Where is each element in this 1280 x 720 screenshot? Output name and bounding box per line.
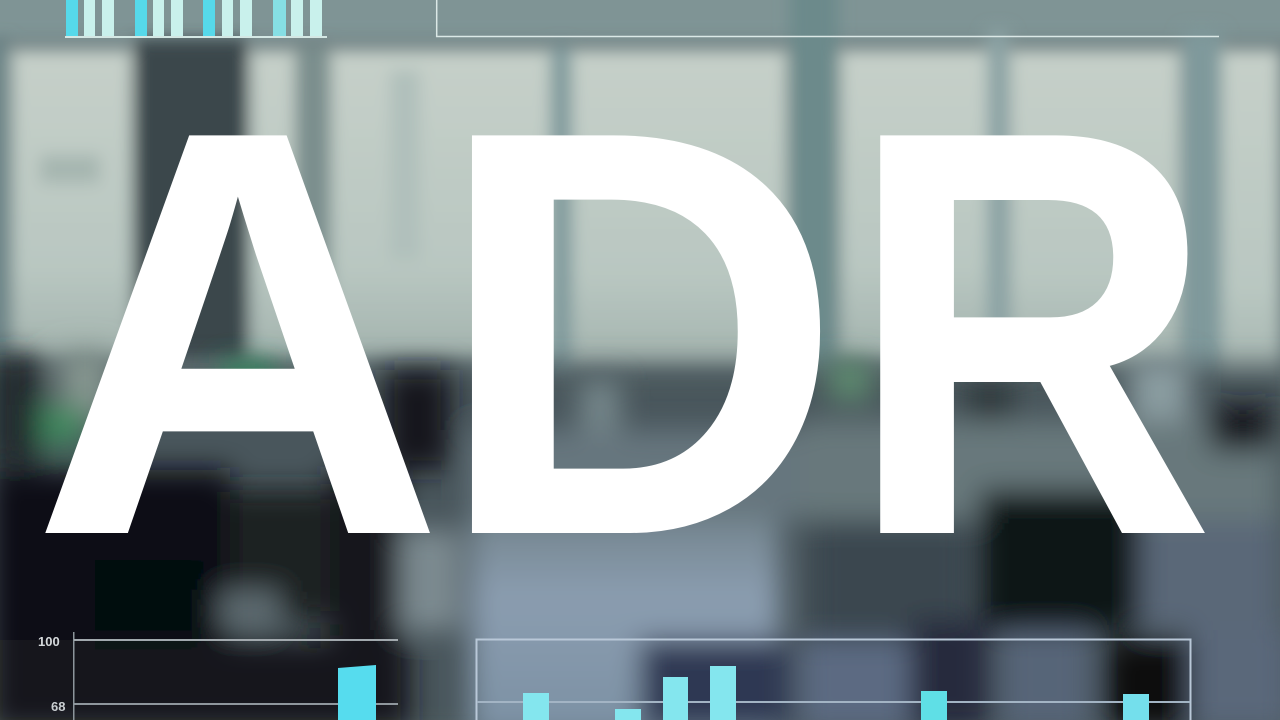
cyan bar <box>338 665 376 720</box>
top right empty chart frame <box>437 0 1219 36</box>
top bar strip chart <box>65 0 327 38</box>
bottom left bar chart <box>38 632 398 720</box>
axis label 100: 100 <box>38 634 60 649</box>
title letters ADR: A <box>31 10 445 655</box>
axis label 68: 68 <box>51 699 65 714</box>
title letters ADR: R <box>846 10 1215 656</box>
bottom right bar chart <box>476 640 1190 720</box>
title letters ADR: D <box>434 10 844 656</box>
